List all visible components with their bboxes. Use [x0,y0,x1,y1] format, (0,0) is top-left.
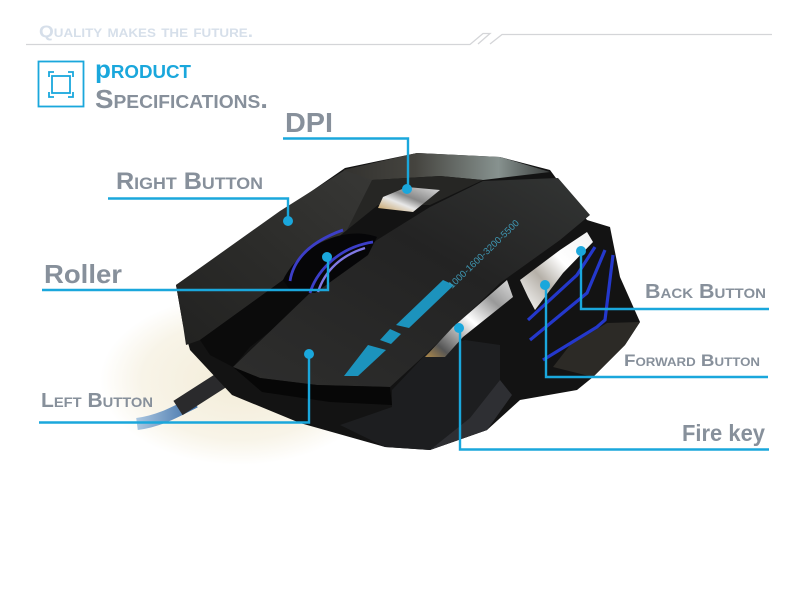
side light strips [528,247,613,360]
label: Roller [42,252,332,290]
header rule [26,34,772,44]
label: Roller: Roller [44,259,122,289]
mouse body [176,153,640,450]
right button [176,170,378,345]
label: Left Button [39,349,314,422]
label: DPI: DPI [285,107,333,138]
scroll wheel [283,234,377,293]
label: Back Button: Back Button [645,281,766,303]
mouse photo [137,153,640,450]
dpi label: 1000-1600-3200-5500 [446,218,522,291]
heading: product [95,56,191,84]
lower shell [340,340,500,450]
heading: Specifications. [95,84,268,114]
label: Right Button [108,168,293,226]
heading [95,56,268,114]
label: Left Button: Left Button [41,390,153,412]
tagline: Quality makes the future. [39,22,253,41]
top shell [343,153,550,180]
side buttons [425,280,513,357]
label: Forward Button: Forward Button [624,351,760,370]
background shadow [100,295,380,465]
central channel [200,280,330,367]
icon: focus frame [38,62,84,106]
front edge [233,367,392,405]
dpi button [378,187,440,212]
left button [233,178,590,387]
label: Forward Button [540,280,768,377]
label: DPI [283,107,412,194]
label: Fire key [454,323,769,450]
cable [137,402,195,424]
label: Back Button [576,246,769,309]
thumb wing [553,322,640,377]
label: Right Button: Right Button [116,168,263,195]
label: Fire key: Fire key [682,420,765,446]
blue stripes [344,345,386,376]
